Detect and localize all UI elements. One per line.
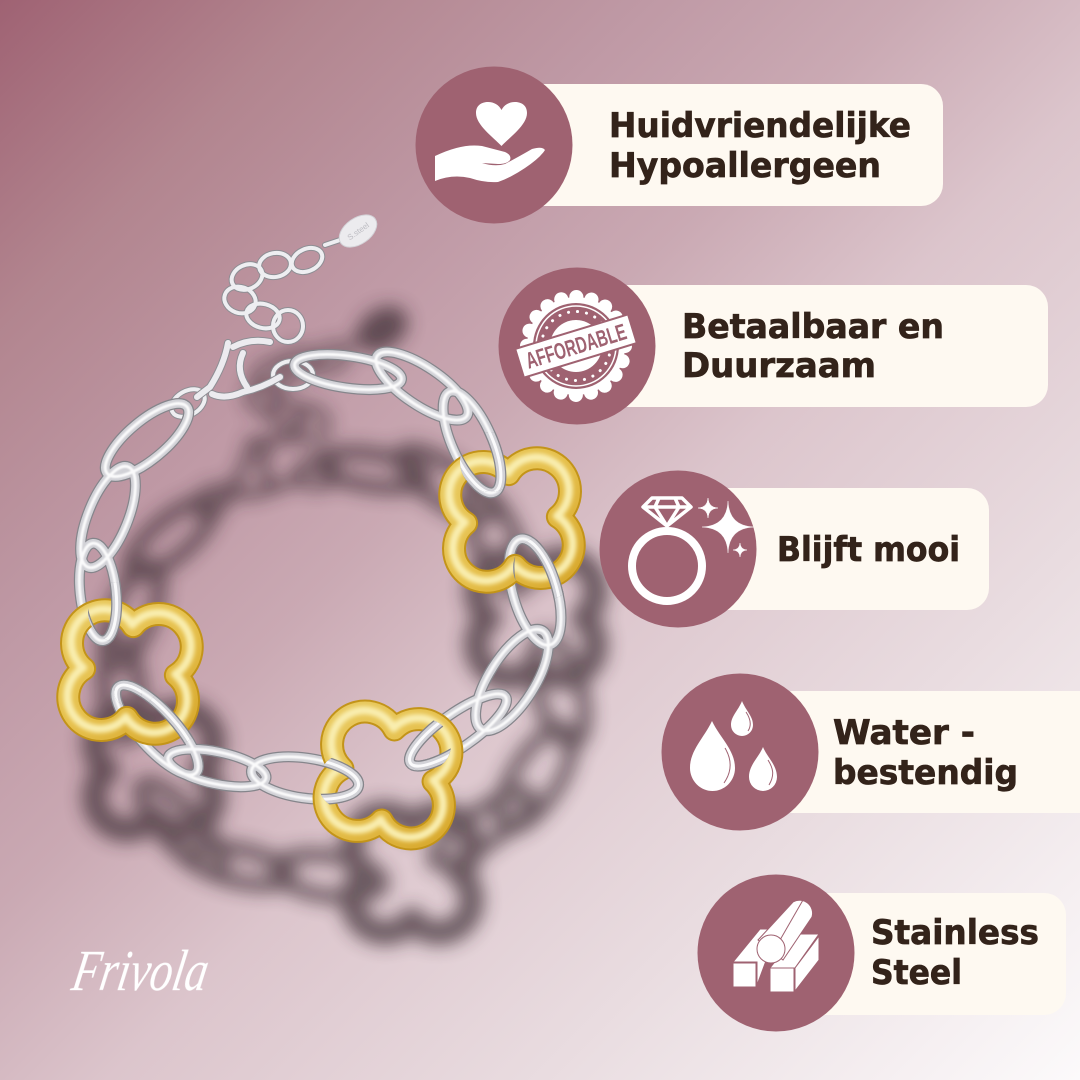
extender chain: [166, 240, 340, 422]
icon: diamond ring with sparkles: [632, 498, 754, 601]
silver links over flowers: [69, 340, 571, 805]
card: [600, 285, 1048, 407]
icon circle: [600, 470, 756, 628]
icon circle: [498, 268, 656, 424]
gold flower right: [447, 455, 576, 584]
brand wordmark: Frivola: [67, 938, 214, 1003]
card: [520, 84, 943, 206]
text: Water -: [833, 713, 975, 753]
text: Hypoallergeen: [609, 146, 881, 186]
icon circle: [416, 66, 572, 224]
card: [800, 893, 1066, 1015]
text: bestendig: [833, 753, 1018, 793]
gold flower left: [65, 607, 194, 736]
lobster clasp: [197, 341, 280, 397]
gold flower bottom: [319, 706, 456, 843]
bracelet: [65, 208, 576, 843]
panel: blijft mooi: [600, 470, 989, 628]
text: Steel: [871, 953, 962, 993]
panel: stainless steel: [698, 874, 1066, 1032]
card: [700, 488, 989, 610]
icon: affordable badge: AFFORDABLE: [522, 318, 630, 374]
card: [770, 691, 1080, 813]
text: Blijft mooi: [777, 530, 960, 570]
silver links: [69, 340, 571, 805]
icon: affordable badge: [515, 297, 637, 395]
icon: steel bars: [733, 900, 819, 992]
icon: hand with heart: [435, 102, 545, 182]
tag: S.steel: [346, 221, 371, 242]
text: Betaalbaar en: [682, 307, 944, 347]
icon: water drops: [690, 701, 777, 791]
panel: huidvriendelijke: [416, 66, 943, 224]
panel: water-bestendig: [662, 674, 1080, 830]
text: Duurzaam: [682, 346, 876, 386]
text: Huidvriendelijke: [609, 106, 911, 146]
panel: betaalbaar: [498, 268, 1048, 424]
icon circle: [698, 874, 854, 1032]
icon circle: [662, 674, 818, 830]
tag: [333, 208, 383, 254]
text: Stainless: [871, 913, 1039, 953]
bracelet shadow: [93, 306, 596, 933]
